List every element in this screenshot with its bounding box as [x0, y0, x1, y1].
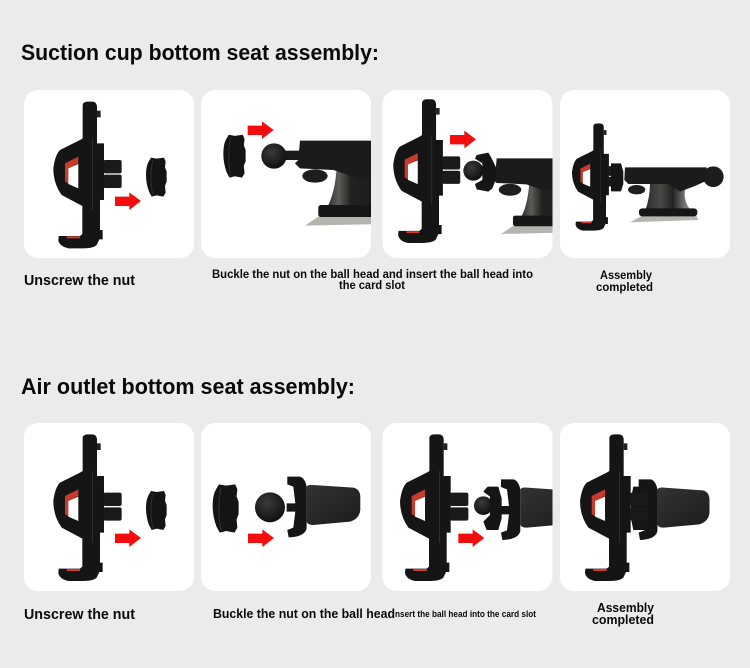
icon: phone holder	[400, 434, 468, 581]
caption: assembly completed: completed	[592, 613, 654, 627]
icon: phone holder	[53, 102, 122, 248]
icon: nut	[631, 487, 648, 530]
arrow: red right	[450, 131, 476, 148]
panel: insert ball head (suction)	[382, 90, 552, 258]
caption: assembly completed: completed	[596, 282, 653, 294]
panel: unscrew the nut (air outlet)	[24, 423, 194, 591]
caption: assembly completed	[596, 270, 653, 294]
panel: buckle the nut (suction)	[201, 90, 371, 258]
panel: insert ball head (air outlet)	[382, 423, 552, 591]
caption: assembly completed	[592, 601, 654, 627]
arrow: red right	[248, 121, 274, 139]
icon: nut	[146, 158, 167, 197]
icon: phone holder small	[572, 124, 622, 231]
panel: assembly completed (air outlet)	[560, 423, 730, 591]
panel: buckle the nut (air outlet)	[201, 423, 371, 591]
icon: nut on ball head	[463, 153, 496, 192]
icon: phone holder	[393, 99, 460, 243]
icon: nut on ball head	[474, 487, 502, 530]
arrow: red right	[115, 192, 141, 210]
caption: buckle the nut: Buckle the nut on the ball head	[213, 607, 395, 621]
caption: unscrew the nut: Unscrew the nut	[24, 607, 135, 623]
icon: suction mount with ball head	[261, 140, 371, 226]
caption: assembly completed: Assembly	[597, 601, 654, 615]
arrow: red right	[248, 529, 274, 547]
icon: vent clip	[501, 479, 552, 540]
heading: suction cup assembly: Suction cup bottom seat assembly:	[21, 40, 379, 65]
icon: phone holder	[53, 434, 122, 581]
icon: phone holder	[580, 434, 648, 581]
arrow: red right	[115, 529, 141, 547]
caption: unscrew the nut: Unscrew the nut	[24, 273, 135, 289]
caption: buckle the nut: Buckle the nut on the ball head and insert the ball head into	[212, 269, 533, 281]
icon: nut	[223, 135, 246, 178]
caption: buckle the nut	[212, 269, 533, 292]
icon: suction mount	[495, 158, 552, 234]
icon: suction mount complete	[611, 163, 724, 222]
panel: assembly completed (suction)	[560, 90, 730, 258]
icon: vent clip with ball head	[255, 477, 360, 537]
arrow: red right	[458, 529, 484, 547]
icon: vent clip	[638, 479, 709, 540]
caption: insert the ball head: nsert the ball head into the card slot	[395, 609, 536, 619]
icon: nut	[146, 491, 167, 530]
icon: nut	[213, 484, 239, 533]
heading: air outlet assembly: Air outlet bottom seat assembly:	[21, 374, 355, 399]
caption: buckle the nut: the card slot	[339, 280, 405, 292]
panel: unscrew the nut (suction)	[24, 90, 194, 258]
caption: assembly completed: Assembly	[600, 270, 653, 282]
